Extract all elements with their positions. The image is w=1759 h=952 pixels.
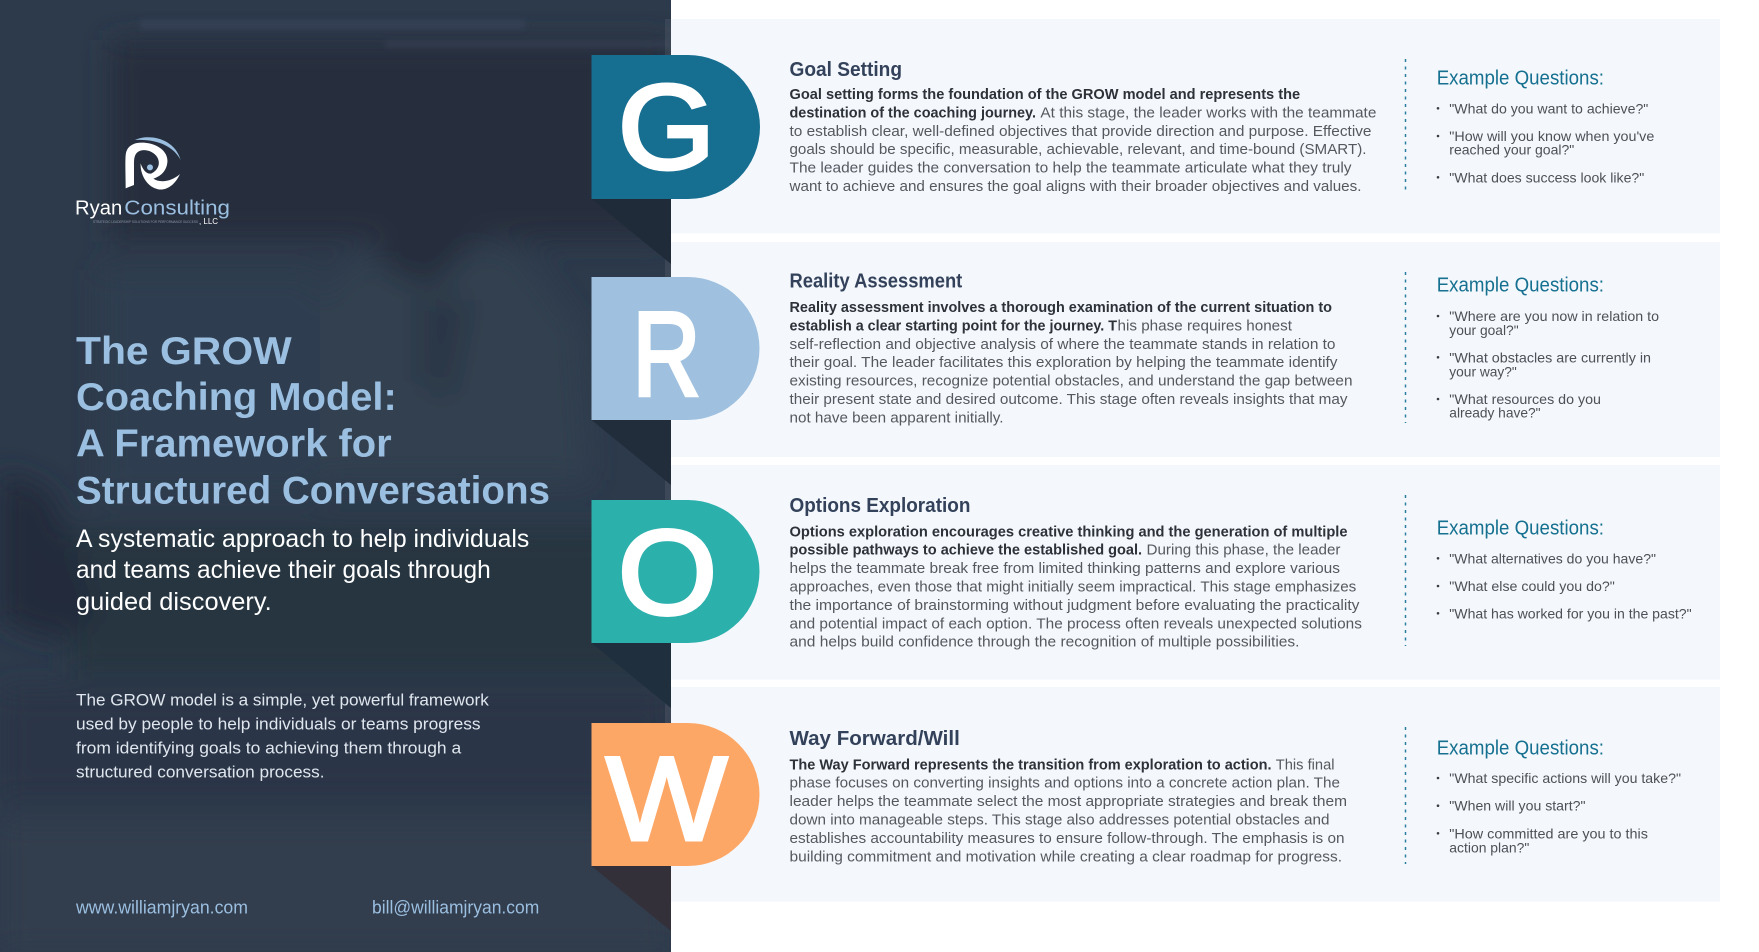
- body: way forward: establishes accountability measures to ensure follow-through. The emphasis is on: [790, 830, 1344, 847]
- body: reality assessment: [790, 299, 1352, 426]
- example questions: goal setting: Example Questions:: [1437, 67, 1604, 89]
- body: options exploration: helps the teammate break free from limited thinking patterns and explore various: [790, 560, 1340, 577]
- title: Coaching Model:: [76, 376, 397, 419]
- example questions: reality assessment: [1437, 275, 1659, 421]
- subtitle: guided discovery.: [76, 588, 272, 616]
- letter block: G: [592, 55, 760, 199]
- subtitle: and teams achieve their goals through: [76, 556, 491, 584]
- example questions: options exploration: Example Questions:: [1437, 517, 1604, 539]
- title: A Framework for: [76, 423, 392, 466]
- body: options exploration: and helps build confidence through the recognition of multiple possibilities.: [790, 634, 1300, 651]
- body: goal setting: Goal setting forms the foundation of the GROW model and represents the: [790, 86, 1300, 103]
- panel: left dark photo background: [0, 0, 671, 952]
- example questions: options exploration: [1437, 517, 1692, 621]
- body: way forward: leader helps the teammate select the most appropriate strategies and break them: [790, 793, 1347, 810]
- body: reality assessment: their goal. The leader facilitates this exploration by helping the teammate identify: [790, 354, 1338, 371]
- example questions: reality assessment: "What obstacles are currently in: [1449, 349, 1651, 365]
- text block: options exploration: [790, 495, 1362, 651]
- intro paragraph: from identifying goals to achieving them through a: [76, 739, 462, 758]
- intro paragraph: The GROW model is a simple, yet powerful framework: [76, 691, 489, 710]
- text block: reality assessment: [790, 270, 1352, 426]
- example questions: goal setting: "What does success look like?": [1449, 169, 1644, 185]
- body: reality assessment: existing resources, recognize potential obstacles, and understand the gap between: [790, 373, 1352, 390]
- example questions: goal setting: "What do you want to achieve?": [1449, 100, 1648, 116]
- body: way forward: building commitment and motivation while creating a clear roadmap for progress.: [790, 848, 1342, 865]
- panel: way forward card: [671, 687, 1720, 902]
- icon: R mark: [125, 137, 181, 190]
- example questions: options exploration: "What else could you do?": [1449, 578, 1615, 594]
- body: options exploration: During this phase, the leader: [1146, 542, 1340, 559]
- letter block: O: [592, 500, 760, 643]
- example questions: way forward: "How committed are you to this: [1449, 825, 1648, 841]
- body: reality assessment: their present state and desired outcome. This stage often reveals insights that may: [790, 391, 1348, 408]
- body: way forward: The Way Forward represents the transition from exploration to action.: [790, 756, 1272, 773]
- example questions: options exploration: "What alternatives do you have?": [1449, 550, 1656, 566]
- panel: reality assessment card: [671, 242, 1720, 457]
- example questions: reality assessment: your way?": [1449, 363, 1517, 379]
- example questions: way forward: "When will you start?": [1449, 798, 1586, 814]
- text block: goal setting: [788, 59, 1376, 195]
- title: [76, 330, 550, 512]
- letter block: W: [592, 723, 760, 866]
- example questions: goal setting: "How will you know when you've: [1449, 128, 1655, 144]
- footer contact links: [75, 897, 539, 917]
- example questions: options exploration: "What has worked for you in the past?": [1449, 605, 1692, 621]
- logo wordmark: [75, 197, 230, 226]
- body: goal setting: The leader guides the conversation to help the teammate articulate what they truly: [790, 160, 1352, 177]
- body: options exploration: approaches, even those that might initially seem impractical. This stage emphasizes: [790, 578, 1356, 596]
- example questions: way forward: action plan?": [1449, 839, 1529, 855]
- logo wordmark: , LLC: [199, 217, 218, 226]
- panel: goal setting card: [671, 19, 1720, 234]
- body: reality assessment: establish a clear starting point for the journey. T: [790, 317, 1117, 334]
- body: way forward: down into manageable steps. This stage also addresses potential obstacles and: [790, 812, 1330, 828]
- body: way forward: This final: [1276, 756, 1334, 773]
- body: goal setting: destination of the coaching journey.: [790, 104, 1036, 121]
- body: goal setting: to establish clear, well-defined objectives that provide direction and purpose. Effective: [790, 123, 1372, 140]
- example questions: reality assessment: "What resources do you: [1449, 391, 1601, 407]
- card edge strips over the dark panel: [665, 19, 671, 902]
- example questions: goal setting: reached your goal?": [1449, 142, 1574, 158]
- heading: goal setting: Goal Setting: [790, 59, 902, 81]
- example questions: reality assessment: Example Questions:: [1437, 275, 1604, 297]
- body: goal setting: At this stage, the leader works with the teammate: [1040, 104, 1376, 121]
- logo wordmark: Ryan: [75, 197, 122, 219]
- example questions: goal setting: [1437, 67, 1655, 185]
- body: reality assessment: self-reflection and objective analysis of where the teammate stands in relation to: [790, 336, 1336, 353]
- body: goal setting: [788, 86, 1376, 195]
- body: options exploration: and potential impact of each option. The process often reveals unexpected solutions: [790, 615, 1362, 632]
- logo wordmark: Consulting: [124, 197, 230, 219]
- subtitle: A systematic approach to help individuals: [76, 525, 529, 553]
- example questions: reality assessment: your goal?": [1449, 322, 1519, 338]
- intro paragraph: used by people to help individuals or teams progress: [76, 715, 481, 734]
- letter block: W: W: [606, 732, 728, 866]
- body: reality assessment: his phase requires honest: [1118, 317, 1293, 334]
- subtitle: [76, 525, 529, 616]
- example questions: reality assessment: "Where are you now in relation to: [1449, 308, 1659, 324]
- body: reality assessment: not have been apparent initially.: [790, 409, 1004, 426]
- heading: options exploration: Options Exploration: [790, 495, 970, 517]
- letter block: G: G: [618, 60, 715, 194]
- body: way forward: phase focuses on converting insights and options into a concrete action plan. The: [790, 775, 1340, 792]
- letter block: R: R: [632, 287, 700, 421]
- logo: Ryan Consulting: [75, 137, 230, 226]
- text block: way forward: [790, 728, 1347, 865]
- block shadows: [592, 199, 671, 931]
- title: The GROW: [76, 330, 292, 373]
- example questions: reality assessment: already have?": [1449, 405, 1541, 421]
- example questions: way forward: [1437, 737, 1681, 855]
- body: options exploration: Options exploration encourages creative thinking and the generation of multiple: [790, 523, 1348, 540]
- example questions: way forward: Example Questions:: [1437, 737, 1604, 759]
- heading: way forward: Way Forward/Will: [790, 728, 960, 750]
- body: goal setting: want to achieve and ensures the goal aligns with their broader objectives and values.: [788, 178, 1362, 195]
- intro paragraph: structured conversation process.: [76, 763, 324, 782]
- footer contact links: www.williamjryan.com: [75, 897, 248, 917]
- panel: options exploration card: [671, 465, 1720, 680]
- intro paragraph: [76, 691, 489, 782]
- body: options exploration: [790, 523, 1362, 651]
- body: options exploration: possible pathways to achieve the established goal.: [790, 542, 1142, 559]
- title: Structured Conversations: [76, 469, 550, 512]
- letter block: O: O: [618, 506, 717, 640]
- heading: reality assessment: Reality Assessment: [790, 270, 963, 292]
- body: goal setting: goals should be specific, measurable, achievable, relevant, and time-bound (SMART).: [790, 141, 1366, 158]
- logo wordmark: STRATEGIC LEADERSHIP SOLUTIONS FOR PERFORMANCE SUCCESS: [93, 220, 198, 224]
- example questions: way forward: "What specific actions will you take?": [1449, 770, 1681, 786]
- footer contact links: bill@williamjryan.com: [372, 897, 539, 917]
- body: reality assessment: Reality assessment involves a thorough examination of the current situation to: [790, 299, 1332, 316]
- letter block: R: [592, 277, 760, 421]
- body: options exploration: the importance of brainstorming without judgment before evaluating the practicality: [790, 597, 1360, 614]
- body: way forward: [790, 756, 1347, 865]
